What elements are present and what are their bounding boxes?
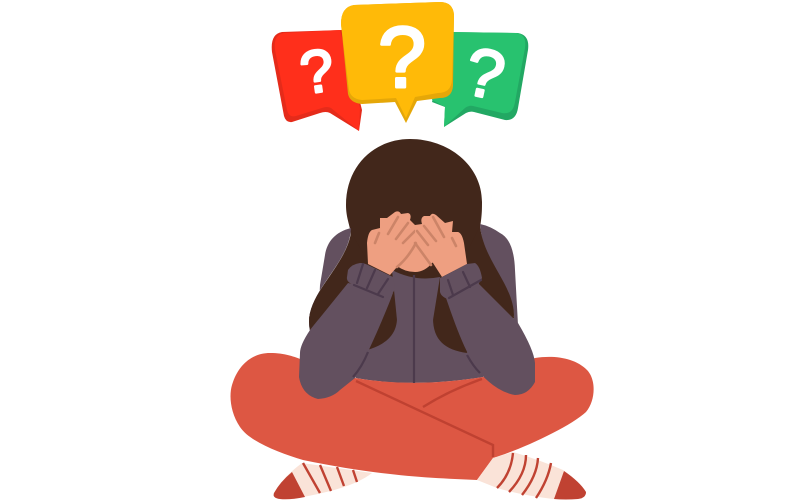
figure: left arm xyxy=(299,283,393,399)
icon: red question bubble xyxy=(272,30,362,131)
figure: left foot sock xyxy=(274,463,372,499)
figure: trouser fold lines xyxy=(356,379,493,457)
figure: right hand xyxy=(415,214,467,277)
figure: right foot sock xyxy=(477,452,586,500)
icon: green question bubble xyxy=(432,32,528,127)
figure: left cuff xyxy=(347,263,395,298)
figure: right arm xyxy=(446,283,535,395)
icon: yellow question bubble xyxy=(341,2,454,123)
icon: green question bubble: ? xyxy=(458,33,511,115)
figure: hair side strands xyxy=(309,226,514,353)
figure: sweater torso xyxy=(309,224,518,383)
figure: right cuff xyxy=(440,263,482,300)
figure: zipper line xyxy=(413,275,415,383)
icon: yellow question bubble: ? xyxy=(378,10,426,106)
figure: left hand xyxy=(367,211,417,275)
icon: red question bubble: ? xyxy=(296,36,338,107)
figure: hair back xyxy=(309,139,514,353)
figure: collar panel xyxy=(392,270,440,320)
figure: face xyxy=(395,240,435,272)
figure: trousers xyxy=(231,353,594,480)
figure: arm creases xyxy=(353,352,480,377)
